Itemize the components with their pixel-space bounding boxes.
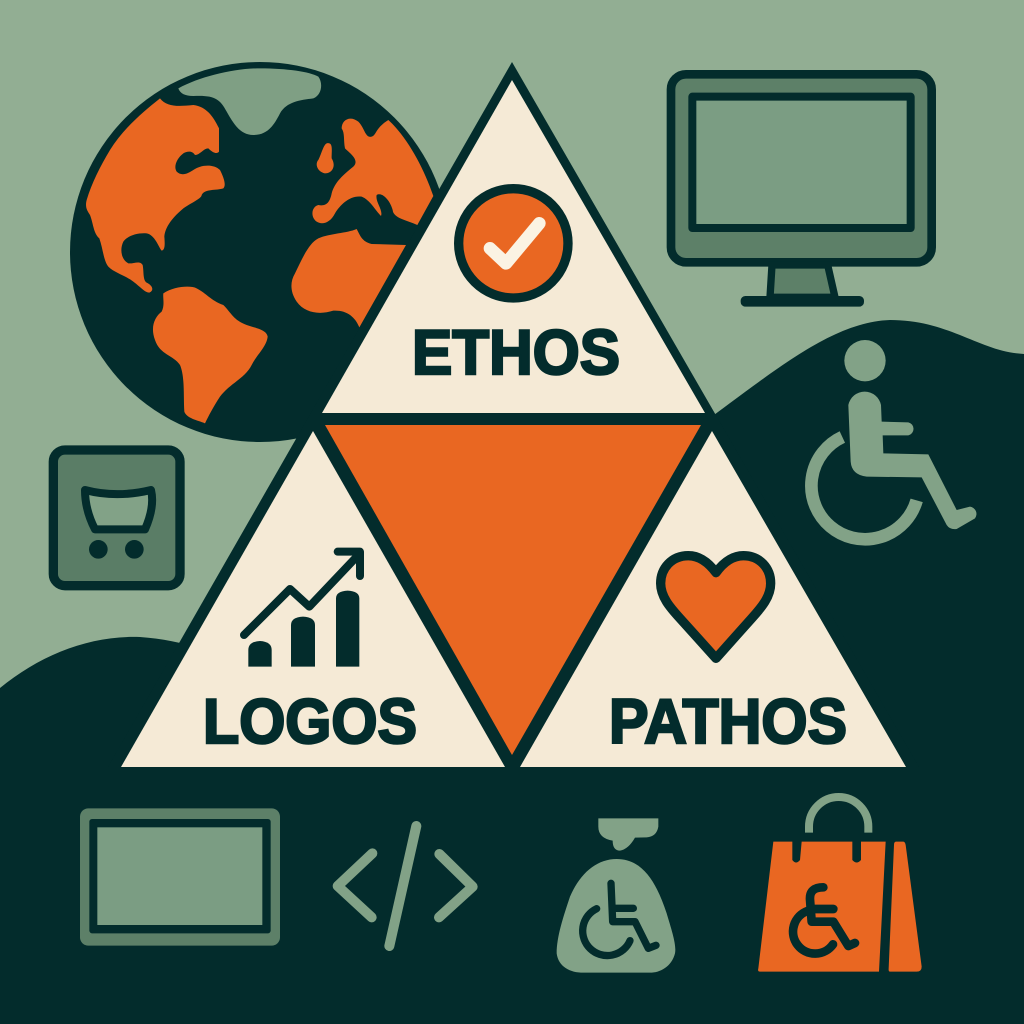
icon: tablet	[80, 808, 280, 946]
panel: logos triangle	[121, 431, 505, 767]
globe: north america	[86, 98, 225, 293]
icon: growth chart	[244, 552, 360, 667]
heading: pathos: PATHOS	[609, 687, 847, 757]
globe: arctic	[178, 68, 321, 135]
globe: eurasia	[312, 119, 433, 225]
icon: accessibility weight bag	[557, 818, 675, 973]
globe: britain	[317, 143, 334, 173]
heading: ethos: ETHOS	[412, 318, 620, 388]
triangle: dark backing	[108, 62, 919, 780]
icon: check badge	[459, 189, 568, 298]
icon: code symbol	[338, 826, 473, 946]
panel: ethos triangle	[322, 80, 705, 413]
heading: logos: LOGOS	[203, 687, 417, 757]
icon: wheelchair user, top right	[811, 340, 976, 539]
panel: center orange triangle	[325, 425, 701, 755]
globe: africa	[291, 229, 406, 327]
icon: heart	[661, 556, 771, 658]
globe: south america	[153, 287, 268, 423]
panel: pathos triangle	[520, 431, 906, 767]
icon: globe	[70, 62, 450, 442]
icon: computer monitor	[671, 74, 932, 307]
icon: orange shopping bag	[758, 797, 922, 972]
dark hill background	[0, 320, 1024, 1024]
icon: shopping cart tile	[53, 450, 180, 586]
